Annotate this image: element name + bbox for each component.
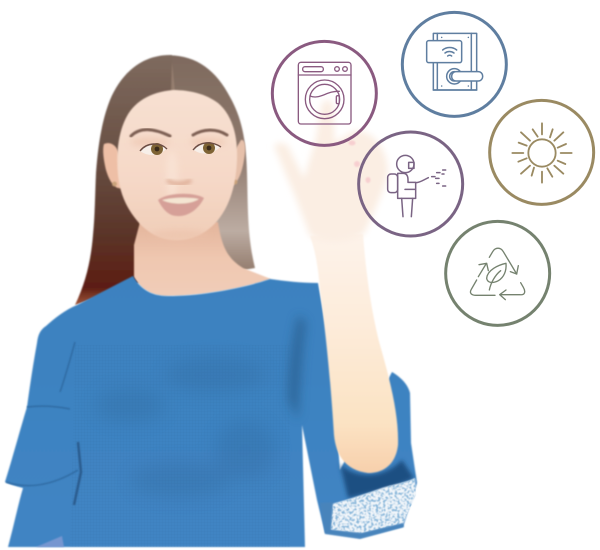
icon: washing machine bbox=[272, 41, 376, 145]
sleeve inner shadow bbox=[288, 315, 306, 420]
mouth bbox=[158, 194, 204, 216]
icon: smart door lock bbox=[402, 12, 506, 116]
icon circles bbox=[272, 12, 594, 325]
icon: recycle leaf bbox=[446, 221, 550, 325]
neck bbox=[134, 222, 271, 296]
eyes bbox=[140, 142, 221, 155]
ears bbox=[103, 140, 245, 188]
woman photo illustration bbox=[5, 55, 420, 547]
icon: sun bbox=[490, 100, 594, 204]
face shading bbox=[130, 138, 226, 240]
sleeve cuff shadow bbox=[340, 460, 414, 498]
raised arm and hand bbox=[274, 100, 398, 473]
shirt texture bbox=[70, 345, 290, 547]
hair bbox=[75, 55, 255, 305]
hem patch under ruffle bbox=[36, 536, 64, 547]
eyebrows bbox=[131, 130, 227, 136]
shirt shading bbox=[95, 357, 275, 498]
lace cuff bbox=[322, 477, 416, 540]
fingernail marks bbox=[348, 140, 370, 183]
ruffle fold lines bbox=[6, 342, 81, 505]
icon: disinfection sprayer bbox=[359, 132, 463, 236]
nose bbox=[167, 180, 191, 184]
face bbox=[117, 90, 237, 240]
shirt bbox=[5, 276, 417, 547]
